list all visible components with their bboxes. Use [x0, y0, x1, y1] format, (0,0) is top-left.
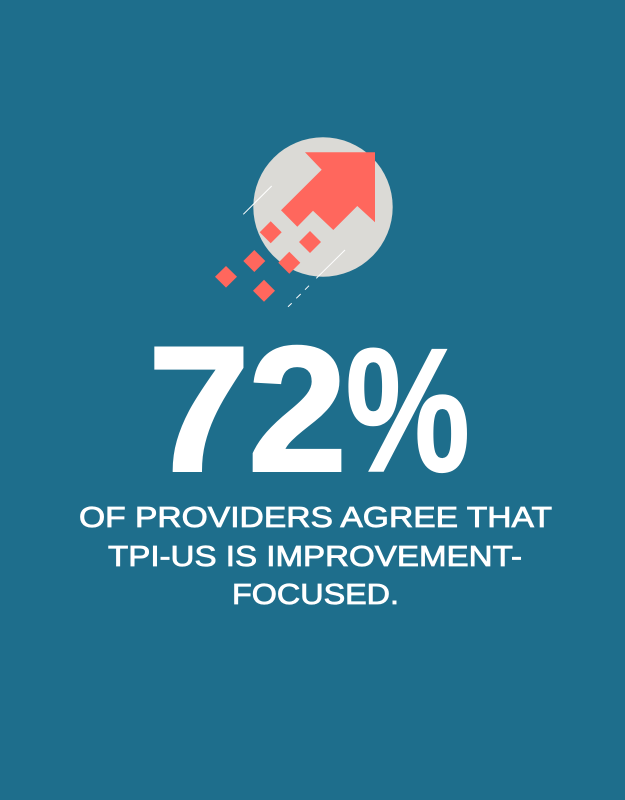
icon: coral arrow [281, 152, 375, 230]
icon: speed lines [243, 186, 345, 307]
statement text: FOCUSED. [232, 579, 399, 611]
statement text: TPI-US IS IMPROVEMENT- [108, 541, 522, 573]
big statistic: 72% [148, 310, 470, 509]
statement text: OF PROVIDERS AGREE THAT [79, 502, 552, 534]
statement text [79, 502, 552, 611]
icon: grey circle [253, 137, 393, 277]
icon: coral diamonds [215, 221, 321, 302]
big statistic: 72%: 2 [248, 310, 347, 508]
big statistic: 72%: % [346, 311, 470, 509]
icon: rising arrow with circle, diamonds and speed lines [215, 137, 393, 307]
big statistic: 72%: 7 [148, 310, 250, 509]
